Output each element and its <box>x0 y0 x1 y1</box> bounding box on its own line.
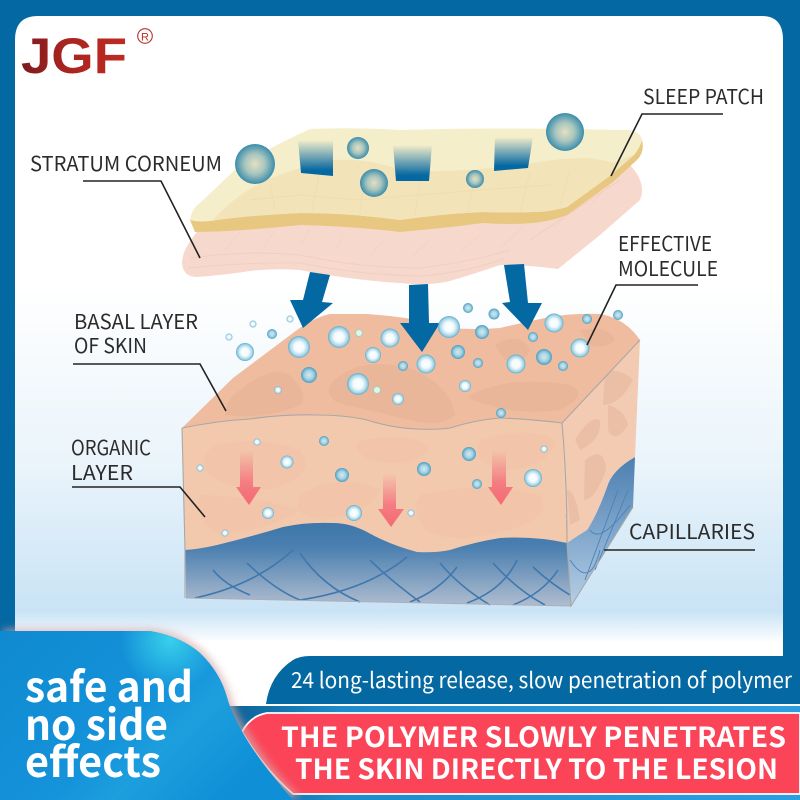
banner: red headline <box>242 713 800 794</box>
capillary layer front <box>185 515 571 606</box>
label: effective molecule: MOLECULE <box>618 252 718 282</box>
patch spheres <box>235 144 275 184</box>
blue strip behind red banner <box>225 706 800 800</box>
capillary lines <box>195 550 570 605</box>
banner: red headline: THE SKIN DIRECTLY TO THE LESION <box>295 748 778 788</box>
label: stratum corneum: STRATUM CORNEUM <box>30 147 222 177</box>
label: capillaries: CAPILLARIES <box>629 515 755 545</box>
banner: red headline: THE POLYMER SLOWLY PENETRATES <box>281 716 786 756</box>
label: effective molecule <box>587 227 718 345</box>
patch edge <box>190 140 643 232</box>
illustration: sleep patch <box>190 113 643 232</box>
skin top face <box>182 314 640 429</box>
panel: safe and no side effects: effects <box>25 729 161 790</box>
logo: JGF: R <box>141 32 149 44</box>
skin front face <box>182 415 567 552</box>
illustration: skin layer under patch <box>182 165 642 284</box>
drug channels <box>298 140 333 176</box>
patch top surface <box>190 128 642 222</box>
label: sleep patch: SLEEP PATCH <box>643 80 764 110</box>
logo: JGF: JGF <box>21 28 127 84</box>
capillary layer side <box>567 457 635 606</box>
label: organic layer: ORGANIC <box>71 431 151 461</box>
arrow: red centre <box>378 473 404 527</box>
label: organic layer <box>71 431 205 517</box>
label: sleep patch <box>611 80 764 176</box>
arrow: blue centre <box>400 284 440 352</box>
capillary layer bottom outline <box>186 598 571 606</box>
arrow: red right <box>488 450 513 505</box>
label: basal layer of skin: BASAL LAYER <box>74 305 198 335</box>
block outlines <box>182 340 640 606</box>
molecules in front face <box>196 436 548 536</box>
panel: safe and no side effects <box>0 629 301 800</box>
arrow: blue left <box>290 272 333 328</box>
patch textured surface <box>213 155 634 220</box>
arrow: blue right <box>502 264 542 330</box>
label: organic layer: LAYER <box>71 456 133 486</box>
label: basal layer of skin: OF SKIN <box>74 329 147 359</box>
label: effective molecule: EFFECTIVE <box>618 227 712 257</box>
top tissue cells <box>225 329 615 423</box>
molecules on top face <box>226 303 623 418</box>
front tissue cells <box>199 432 555 538</box>
label: basal layer of skin <box>73 305 226 411</box>
arrow: red left <box>236 450 261 505</box>
panel: safe and no side effects: safe and <box>25 654 193 715</box>
label: stratum corneum <box>30 147 222 258</box>
skin side face <box>562 340 640 543</box>
white gap below release banner <box>225 704 800 706</box>
illustration: skin block <box>182 314 640 606</box>
banner: release text <box>266 656 800 704</box>
panel: safe and no side effects: no side <box>25 692 168 753</box>
